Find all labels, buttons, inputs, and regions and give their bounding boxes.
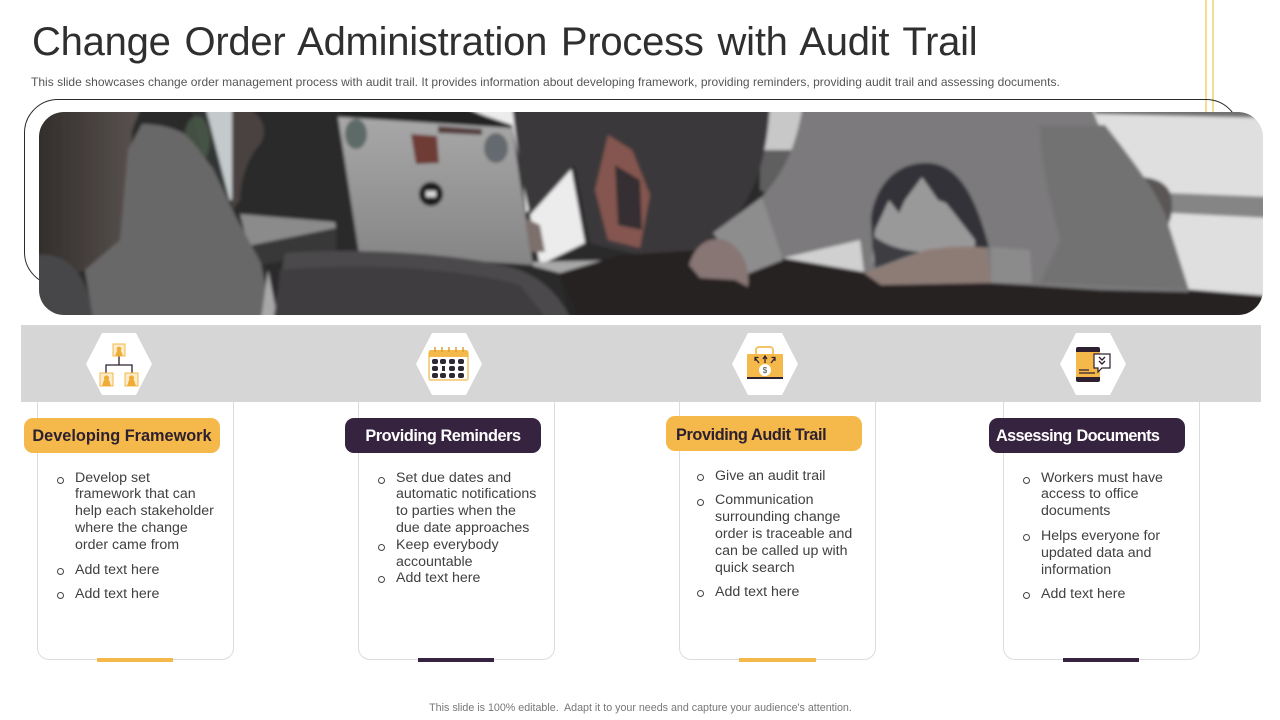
- card: assessing documents: [1003, 402, 1200, 660]
- list: assessing documents: access to office: [1041, 486, 1139, 502]
- list: assessing documents: information: [1041, 562, 1111, 578]
- list: providing audit trail: Add text here: [715, 584, 799, 600]
- list: providing audit trail: [697, 468, 852, 600]
- list: providing audit trail: surrounding change: [715, 509, 840, 525]
- heading: Providing Reminders: Providing Reminders: [365, 427, 521, 445]
- list: assessing documents: Helps everyone for: [1041, 528, 1160, 544]
- list: developing framework: help each stakeholder: [75, 503, 214, 519]
- list: providing reminders: due date approaches: [396, 520, 529, 536]
- heading: Assessing Documents: [989, 418, 1185, 453]
- grey band: [21, 325, 1261, 402]
- list: developing framework: where the change: [75, 520, 188, 536]
- list: providing reminders: accountable: [396, 554, 473, 570]
- heading: Providing Audit Trail: [666, 416, 862, 451]
- list: providing reminders: [378, 470, 536, 586]
- outline frame behind photo: [24, 99, 1240, 286]
- list: developing framework: Add text here: [75, 562, 159, 578]
- accent bar 3: [739, 658, 816, 662]
- accent bar 2: [418, 658, 494, 662]
- list: providing audit trail: can be called up with: [715, 543, 848, 559]
- list: assessing documents: Add text here: [1041, 586, 1125, 602]
- heading: Developing Framework: Developing Framework: [32, 427, 212, 445]
- icon: org chart in hexagon: [86, 333, 152, 395]
- footer note: This slide is 100% editable. Adapt it to your needs and capture your audience's attention.: [429, 702, 852, 714]
- heading: Developing Framework: [24, 418, 220, 453]
- icon: phone with message in hexagon: [1060, 333, 1126, 395]
- icon: briefcase with dollar in hexagon: [732, 333, 798, 395]
- list: assessing documents: [1023, 470, 1163, 602]
- heading: Providing Audit Trail: Providing Audit Trail: [676, 426, 826, 444]
- card: providing audit trail: [679, 402, 876, 660]
- card: developing framework: [37, 402, 234, 660]
- list: providing audit trail: order is traceable and: [715, 526, 852, 542]
- title: Change Order Administration Process with Audit Trail: [32, 20, 977, 64]
- subtitle: This slide showcases change order management process with audit trail. It provides information about developing framework, providing reminders, providing audit trail and assessing documents.: [31, 75, 1060, 89]
- list: developing framework: [57, 470, 214, 602]
- icon: briefcase with dollar in hexagon: $: [763, 366, 768, 375]
- heading: Assessing Documents: Assessing Documents: [996, 427, 1159, 445]
- list: providing audit trail: Communication: [715, 492, 814, 508]
- list: assessing documents: Workers must have: [1041, 470, 1163, 486]
- decorative gold lines top right: [1205, 0, 1214, 116]
- heading: Providing Reminders: [345, 418, 541, 453]
- list: providing audit trail: Give an audit trail: [715, 468, 825, 484]
- accent bar 4: [1063, 658, 1139, 662]
- list: providing reminders: Add text here: [396, 570, 480, 586]
- list: providing reminders: automatic notifications: [396, 486, 536, 502]
- list: providing reminders: to parties when the: [396, 503, 516, 519]
- list: assessing documents: updated data and: [1041, 545, 1151, 561]
- icon: calendar in hexagon: [416, 333, 482, 395]
- list: developing framework: framework that can: [75, 486, 196, 502]
- list: providing reminders: Keep everybody: [396, 537, 499, 553]
- list: developing framework: order came from: [75, 537, 179, 553]
- list: developing framework: Add text here: [75, 586, 159, 602]
- list: assessing documents: documents: [1041, 503, 1110, 519]
- list: providing reminders: Set due dates and: [396, 470, 511, 486]
- accent bar 1: [97, 658, 173, 662]
- list: developing framework: Develop set: [75, 470, 150, 486]
- list: providing audit trail: quick search: [715, 560, 795, 576]
- photo: team at a table with laptops: [39, 112, 1263, 315]
- card: providing reminders: [358, 402, 555, 660]
